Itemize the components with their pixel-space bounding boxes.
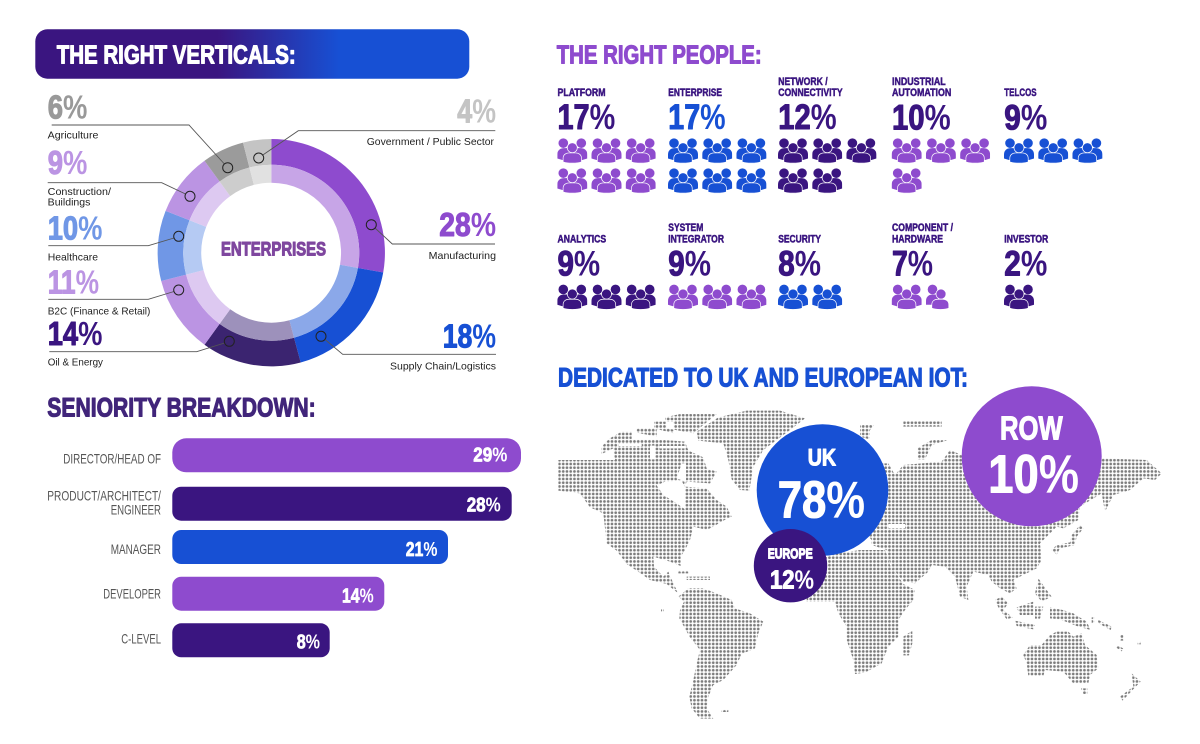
callout: oil and energy 14%: 14% xyxy=(48,315,102,352)
donut segments outer ring xyxy=(158,139,385,366)
stat: analytics 9%: 9% xyxy=(558,244,600,284)
bar: manager: 21% xyxy=(406,539,438,561)
donut chart: enterprises xyxy=(158,139,385,366)
callout: construction 9% xyxy=(48,144,195,209)
bar: developer: DEVELOPER xyxy=(103,586,161,602)
bubble: UK 78%: 78% xyxy=(778,471,865,529)
stat: security 8%: SECURITY xyxy=(778,233,821,245)
bar: c-level: 8% xyxy=(297,631,320,653)
callout: B2C 11%: B2C (Finance & Retail) xyxy=(48,305,150,317)
callout: agriculture 6%: 6% xyxy=(48,88,87,125)
bar: manager xyxy=(111,530,448,564)
stat: investor 2%: 2% xyxy=(1004,245,1047,284)
bubble: ROW 10%: 10% xyxy=(988,445,1079,505)
callout: healthcare 10%: Healthcare xyxy=(48,252,98,264)
heading: the right verticals: THE RIGHT VERTICALS: xyxy=(57,41,296,69)
stat: analytics 9%: ANALYTICS xyxy=(558,233,606,245)
callout: construction 9%: Buildings xyxy=(48,197,90,209)
stat: platform 17%: 17% xyxy=(558,98,615,137)
bubble: UK 78% xyxy=(757,424,888,556)
callout: B2C 11% xyxy=(48,263,184,317)
stat: network 12%: 12% xyxy=(778,98,837,137)
bar: product: ENGINEER xyxy=(111,501,161,517)
stat: telcos 9%: TELCOS xyxy=(1004,87,1037,99)
callout: manufacturing 28%: Manufacturing xyxy=(429,250,496,262)
callout: government 4%: 4% xyxy=(457,93,496,130)
stat: enterprise 17%: 17% xyxy=(668,98,726,137)
bar: director: DIRECTOR/HEAD OF xyxy=(63,450,161,466)
callout: agriculture 6% xyxy=(48,88,233,173)
callout: manufacturing 28%: 28% xyxy=(439,206,496,243)
callout: construction 9%: Construction/ xyxy=(48,186,111,198)
bubble: Europe 12%: 12% xyxy=(770,564,814,594)
callout: B2C 11%: 11% xyxy=(48,263,99,300)
stat: system integrator 9%: SYSTEM xyxy=(668,222,703,234)
stat: system integrator 9%: INTEGRATOR xyxy=(668,233,724,245)
bar: director xyxy=(63,438,521,472)
stat: component hardware 7%: 7% xyxy=(892,245,933,284)
stat: telcos 9%: 9% xyxy=(1004,98,1047,137)
callout: oil and energy 14% xyxy=(48,315,234,369)
stat: industrial automation 10%: 10% xyxy=(892,98,951,137)
callout: government 4% xyxy=(254,93,496,163)
stat: component hardware 7%: COMPONENT / xyxy=(892,222,953,234)
stat: component hardware 7%: HARDWARE xyxy=(892,233,943,245)
heading: the right people: THE RIGHT PEOPLE: xyxy=(557,41,762,69)
bubble: Europe 12% xyxy=(754,529,827,602)
bar: developer xyxy=(103,577,384,611)
stat: network 12% xyxy=(778,76,876,193)
callout: healthcare 10%: 10% xyxy=(48,209,102,246)
stat: platform 17% xyxy=(557,87,656,193)
bubble: Europe 12%: EUROPE xyxy=(768,546,813,562)
stat: telcos 9% xyxy=(1004,87,1102,163)
stat: enterprise 17% xyxy=(668,87,766,193)
callout: healthcare 10% xyxy=(48,209,184,264)
stat: industrial automation 10% xyxy=(892,76,990,193)
dotted world map xyxy=(558,410,1161,719)
stat: enterprise 17%: ENTERPRISE xyxy=(668,87,722,99)
bar: director: 29% xyxy=(473,445,507,467)
callout: supply chain 18% xyxy=(316,317,496,372)
bar: developer: 14% xyxy=(342,586,374,608)
bubble: ROW 10%: ROW xyxy=(1000,409,1063,446)
banner: the right verticals xyxy=(35,29,469,79)
stat: system integrator 9%: 9% xyxy=(668,244,711,284)
bubble: UK 78%: UK xyxy=(808,445,836,472)
stat: analytics 9% xyxy=(557,233,656,309)
bar: product: PRODUCT/ARCHITECT/ xyxy=(47,488,161,504)
heading: dedicated to UK and European IoT: DEDICATED TO UK AND EUROPEAN IOT: xyxy=(558,363,968,393)
donut segments inner ring xyxy=(183,165,359,341)
stat: industrial automation 10%: AUTOMATION xyxy=(892,87,951,99)
heading: seniority breakdown: SENIORITY BREAKDOWN: xyxy=(47,393,316,423)
bar: product: 28% xyxy=(467,494,501,516)
stat: security 8%: 8% xyxy=(778,244,821,284)
stat: network 12%: CONNECTIVITY xyxy=(778,87,843,99)
stat: component hardware 7% xyxy=(892,222,953,309)
stat: investor 2%: INVESTOR xyxy=(1004,233,1049,245)
stat: industrial automation 10%: INDUSTRIAL xyxy=(892,76,946,88)
callout: agriculture 6%: Agriculture xyxy=(48,129,99,141)
callout: manufacturing 28% xyxy=(366,206,496,262)
stat: network 12%: NETWORK / xyxy=(778,76,828,88)
callout: oil and energy 14%: Oil & Energy xyxy=(48,357,104,369)
panel: seniority breakdown xyxy=(47,393,521,657)
bar: manager: MANAGER xyxy=(111,541,161,557)
bar: c-level xyxy=(121,623,330,657)
stat: investor 2% xyxy=(1004,233,1049,309)
bar: product xyxy=(47,487,512,521)
callout: construction 9%: 9% xyxy=(48,144,87,181)
stat: system integrator 9% xyxy=(668,222,766,309)
donut centre label: ENTERPRISES xyxy=(221,239,326,261)
stat: security 8% xyxy=(778,233,842,309)
stat: platform 17%: PLATFORM xyxy=(558,87,606,99)
bubble: ROW 10% xyxy=(962,386,1102,526)
bar: c-level: C-LEVEL xyxy=(121,630,161,646)
callout: government 4%: Government / Public Sector xyxy=(367,136,494,148)
callout: supply chain 18%: 18% xyxy=(443,317,496,354)
callout: supply chain 18%: Supply Chain/Logistics xyxy=(390,360,496,372)
